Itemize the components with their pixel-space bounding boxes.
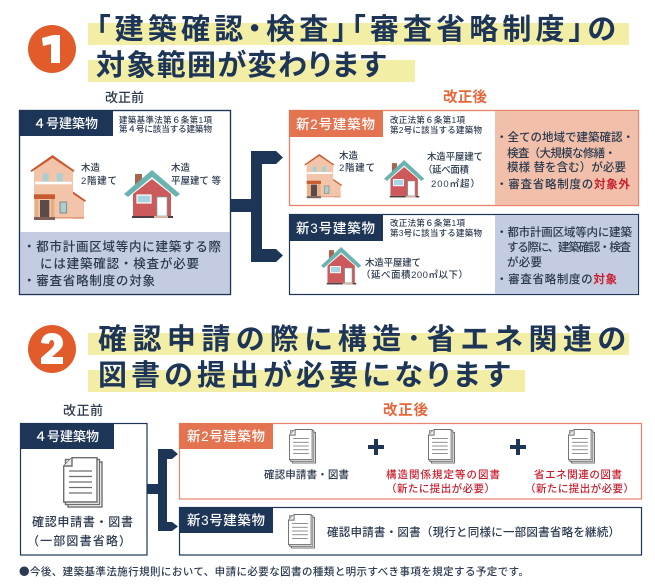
icon: documents	[64, 458, 102, 507]
label after: 改正後	[443, 88, 488, 106]
label house 2: 木造	[171, 162, 190, 174]
panel: new type 3 documents	[179, 507, 642, 555]
title highlight band line 2	[88, 370, 525, 392]
header: type 4	[19, 110, 113, 136]
label house 2	[171, 162, 221, 187]
header: type 4	[20, 423, 114, 449]
document label 3	[525, 468, 634, 495]
header: new type 2	[179, 423, 273, 449]
title highlight band line 2	[88, 60, 415, 82]
icon: plus 1	[368, 439, 384, 455]
label house 2	[423, 151, 483, 190]
title highlight band line 1	[88, 23, 629, 45]
panel: old type 4 building	[19, 110, 230, 294]
icon: document 2	[428, 429, 455, 463]
header: new type 3	[289, 214, 383, 241]
header text: 新2号建築物	[187, 428, 265, 444]
icon: single-storey house	[124, 170, 180, 218]
footnote: ●今後、建築基準法施行規則において、申請に必要な図書の種類と明示すべき事項を規定する予定です。	[19, 564, 529, 579]
icon: document 1	[289, 429, 316, 463]
conditions text: ・都市計画区域等内に建築	[496, 225, 632, 239]
header text: ４号建築物	[34, 429, 99, 444]
conditions text: ・都市計画区域等内に建築する際	[23, 239, 221, 254]
label house 2: 200㎡超）	[431, 178, 480, 190]
icon: document 3	[568, 429, 595, 463]
right orange condition box	[495, 111, 638, 205]
document label 2	[386, 468, 500, 495]
document label 3: 省エネ関連の図書	[534, 468, 622, 481]
label house 1: 木造	[81, 162, 100, 174]
conditions text	[496, 225, 632, 286]
conditions text: ・審査省略制度の対象	[496, 272, 618, 286]
label house 2: （延べ面積	[423, 164, 469, 176]
header: new type 3	[179, 507, 273, 533]
document label 2: （新たに提出が必要）	[386, 482, 495, 495]
document label 3: （新たに提出が必要）	[525, 482, 634, 495]
title section 1 line 2: 対象範囲が変わります	[96, 48, 386, 82]
panel: new type 2 building	[289, 110, 638, 206]
label before: 改正前	[63, 403, 103, 418]
conditions text: ・審査省略制度の対象	[23, 273, 155, 288]
legal reference: 改正法第６条第1項	[390, 218, 465, 228]
legal reference	[390, 218, 482, 238]
conditions text: 模様 替を含む）が必要	[507, 160, 626, 174]
label house 1: 木造	[339, 150, 358, 162]
conditions text: 検査（大規模な修繕・	[507, 146, 616, 160]
icon: two-storey house	[304, 154, 342, 198]
header text: ４号建築物	[33, 116, 98, 131]
document label	[27, 514, 133, 548]
arrow: branching bracket 1	[230, 151, 283, 262]
header: new type 2	[289, 110, 383, 137]
conditions text	[23, 239, 221, 288]
conditions text	[496, 130, 634, 191]
blue condition box	[19, 232, 230, 294]
label house 1: 2階建て	[81, 175, 117, 187]
icon: single-storey house	[384, 160, 424, 197]
right blue condition box	[495, 215, 638, 294]
conditions text: する際に、建築確認・検査	[507, 240, 632, 254]
document label: （一部図書省略）	[27, 533, 131, 548]
panel: old type 4 documents	[20, 423, 147, 555]
panel: new type 3 building	[289, 214, 638, 294]
title highlight band line 1	[88, 333, 629, 355]
header text: 新2号建築物	[296, 116, 375, 132]
conditions text: ・審査省略制度の対象外	[496, 177, 630, 191]
number badge 1	[28, 25, 76, 73]
legal reference: 改正法第６条第1項	[390, 115, 465, 125]
label house	[361, 257, 468, 281]
legal reference: 建築基準法第６条第1項	[119, 115, 212, 125]
legal reference	[390, 115, 482, 135]
title section 2 line 1: 確認申請の際に構造･省エネ関連の	[98, 323, 626, 356]
icon: single-storey house	[321, 247, 361, 284]
conditions text: ・全ての地域で建築確認・	[496, 130, 634, 144]
header text: 新3号建築物	[187, 512, 265, 528]
label house: （延べ面積200㎡以下）	[361, 269, 468, 281]
label after: 改正後	[383, 401, 428, 419]
label house 2: 平屋建て 等	[171, 175, 221, 187]
legal reference: 第3号に該当する建築物	[390, 228, 482, 238]
label house 2: 木造平屋建て	[427, 151, 483, 163]
legal reference: 第2号に該当する建築物	[390, 125, 482, 135]
legal reference: 第４号に該当する建築物	[119, 124, 212, 134]
header text: 新3号建築物	[296, 220, 375, 236]
label house 1	[339, 150, 375, 174]
number badge 2	[28, 325, 76, 373]
label house 1	[81, 162, 117, 187]
arrow: branching bracket 2	[147, 449, 178, 531]
title section 1 line 1: 「建築確認・検査」「審査省略制度」の	[96, 13, 616, 46]
label before: 改正前	[105, 90, 144, 105]
title section 2 line 2: 図書の提出が必要になります	[98, 358, 510, 392]
section 2	[19, 323, 642, 579]
icon: document	[288, 514, 315, 548]
document label 1: 確認申請書・図書	[264, 468, 349, 481]
legal reference	[119, 115, 212, 134]
label house 1: 2階建て	[339, 162, 375, 174]
document label: 確認申請書・図書（現行と同様に一部図書省略を継続）	[327, 525, 620, 539]
section 1	[19, 13, 638, 294]
icon: plus 2	[510, 439, 526, 455]
document label: 確認申請書・図書	[32, 514, 133, 529]
label house: 木造平屋建て	[365, 257, 421, 269]
conditions text: には建築確認・検査が必要	[40, 256, 199, 271]
panel: new type 2 documents	[179, 423, 642, 499]
icon: two-storey house	[30, 155, 86, 220]
document label 2: 構造関係規定等の図書	[386, 468, 500, 481]
conditions text: が必要	[507, 255, 542, 269]
